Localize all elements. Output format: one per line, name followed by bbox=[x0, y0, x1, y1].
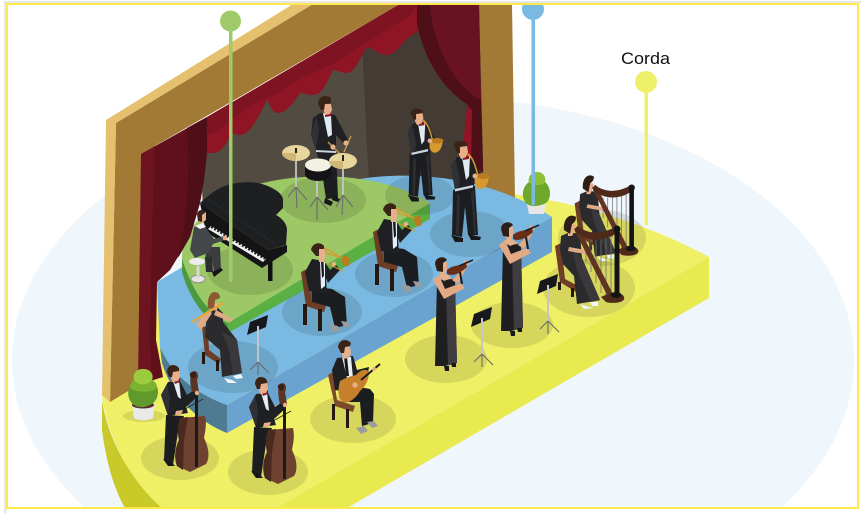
pin: strings bbox=[635, 71, 657, 225]
shadows under musicians bbox=[141, 175, 646, 495]
musician: flute bbox=[192, 292, 243, 383]
stage frame bbox=[102, 4, 515, 402]
musician: saxophone front bbox=[451, 141, 490, 242]
left curtain bbox=[138, 117, 207, 385]
label: Corda: Corda bbox=[621, 50, 671, 68]
plant: right bbox=[523, 172, 550, 214]
musician: drummer with drum kit bbox=[282, 96, 357, 220]
music stand: violin back bbox=[537, 274, 559, 334]
plant: left bbox=[123, 369, 165, 422]
musician: cello left bbox=[161, 365, 208, 472]
top valance bbox=[207, 4, 417, 153]
right curtain bbox=[414, 4, 483, 172]
green platform bbox=[182, 176, 430, 333]
backstage wall bbox=[202, 5, 484, 210]
musician: violin back bbox=[499, 222, 539, 336]
grand piano bbox=[200, 182, 287, 281]
pin: percussion bbox=[220, 10, 241, 282]
musician: pianist on stool bbox=[189, 210, 227, 283]
yellow lower platform bbox=[102, 194, 709, 508]
musician: trombone back bbox=[373, 203, 423, 292]
musician: cello right bbox=[249, 377, 296, 484]
musician: saxophone back bbox=[408, 108, 443, 201]
light blue background ellipse bbox=[12, 97, 854, 508]
music stand: violin front bbox=[471, 307, 493, 367]
musician: violin front bbox=[433, 257, 473, 371]
musician: harp back bbox=[575, 175, 638, 261]
musician: trombone front bbox=[301, 243, 351, 332]
pin: wind bbox=[522, 0, 544, 205]
music stand: flute bbox=[247, 315, 269, 375]
blue platform bbox=[157, 176, 552, 433]
musician: guitar bbox=[328, 340, 380, 434]
musician: harp front bbox=[555, 216, 624, 309]
